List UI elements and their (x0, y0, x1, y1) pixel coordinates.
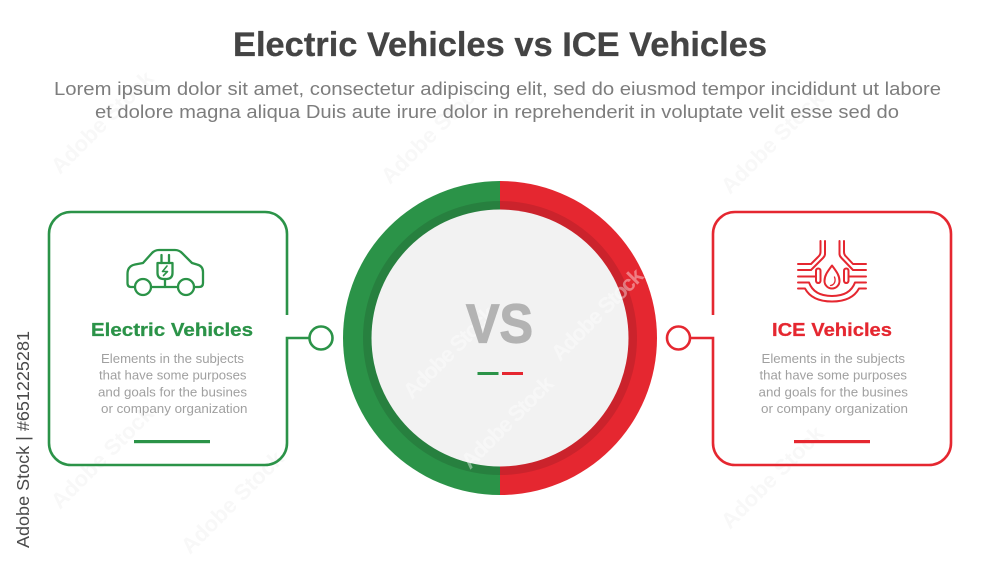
description: ice vehicles: or company organization (761, 401, 908, 416)
description: electric vehicles: or company organization (101, 401, 248, 416)
background watermarks: Adobe Stock (716, 420, 829, 534)
vs label: VS (466, 292, 533, 354)
disc watermarks: Adobe Stock (546, 262, 649, 366)
background watermarks: Adobe Stock (716, 85, 829, 199)
background watermarks: Adobe Stock (176, 445, 289, 559)
background watermarks (46, 65, 829, 559)
description: electric vehicles: and goals for the busines (98, 384, 247, 400)
accent bar: ice (794, 440, 870, 443)
description: ice vehicles: that have some purposes (760, 368, 907, 382)
title: Electric Vehicles vs ICE Vehicles (233, 26, 767, 64)
icon: engine oil drop in pipes (798, 241, 866, 302)
panel: electric vehicles (49, 212, 332, 465)
description: ice vehicles (758, 351, 908, 416)
inner ring shade: red half (500, 201, 637, 475)
background watermarks: Adobe Stock (376, 75, 489, 189)
panel outline with connector: ice (691, 212, 951, 465)
description: ice vehicles: Elements in the subjects (762, 351, 906, 366)
background watermarks: Adobe Stock (46, 400, 159, 514)
ring: red half (500, 181, 657, 495)
description: ice vehicles: and goals for the busines (758, 384, 908, 400)
connector node: ice (667, 326, 690, 350)
center vs circle (343, 181, 657, 495)
disc watermarks: Adobe Stock (456, 370, 559, 474)
connector node: electric (310, 326, 332, 350)
side credit text: Adobe Stock | #651225281 (13, 331, 33, 548)
disc watermarks (398, 262, 649, 474)
disc watermarks: Adobe Stock (398, 300, 501, 404)
inner disc (372, 210, 628, 466)
subtitle text block (54, 79, 941, 122)
description: electric vehicles: that have some purposes (99, 368, 247, 382)
inner ring shade: green half (363, 201, 500, 475)
description: electric vehicles (98, 351, 248, 416)
description: electric vehicles: Elements in the subjects (101, 351, 245, 366)
panel: ice vehicles (667, 212, 951, 465)
vs dash: red (502, 372, 523, 375)
background watermarks: Adobe Stock (46, 65, 159, 179)
vs dash: green (478, 372, 498, 375)
heading: ice vehicles: ICE Vehicles (772, 319, 892, 340)
accent bar: electric (134, 440, 210, 443)
heading: electric vehicles: Electric Vehicles (91, 319, 253, 340)
ring: green half (343, 181, 500, 495)
icon: electric car with plug (128, 250, 203, 295)
subtitle text block: Lorem ipsum dolor sit amet, consectetur adipiscing elit, sed do eiusmod tempor incididunt ut labore (54, 79, 941, 99)
subtitle text block: et dolore magna aliqua Duis aute irure dolor in reprehenderit in voluptate velit esse sed do (95, 102, 899, 122)
panel outline with connector: electric (49, 212, 309, 465)
